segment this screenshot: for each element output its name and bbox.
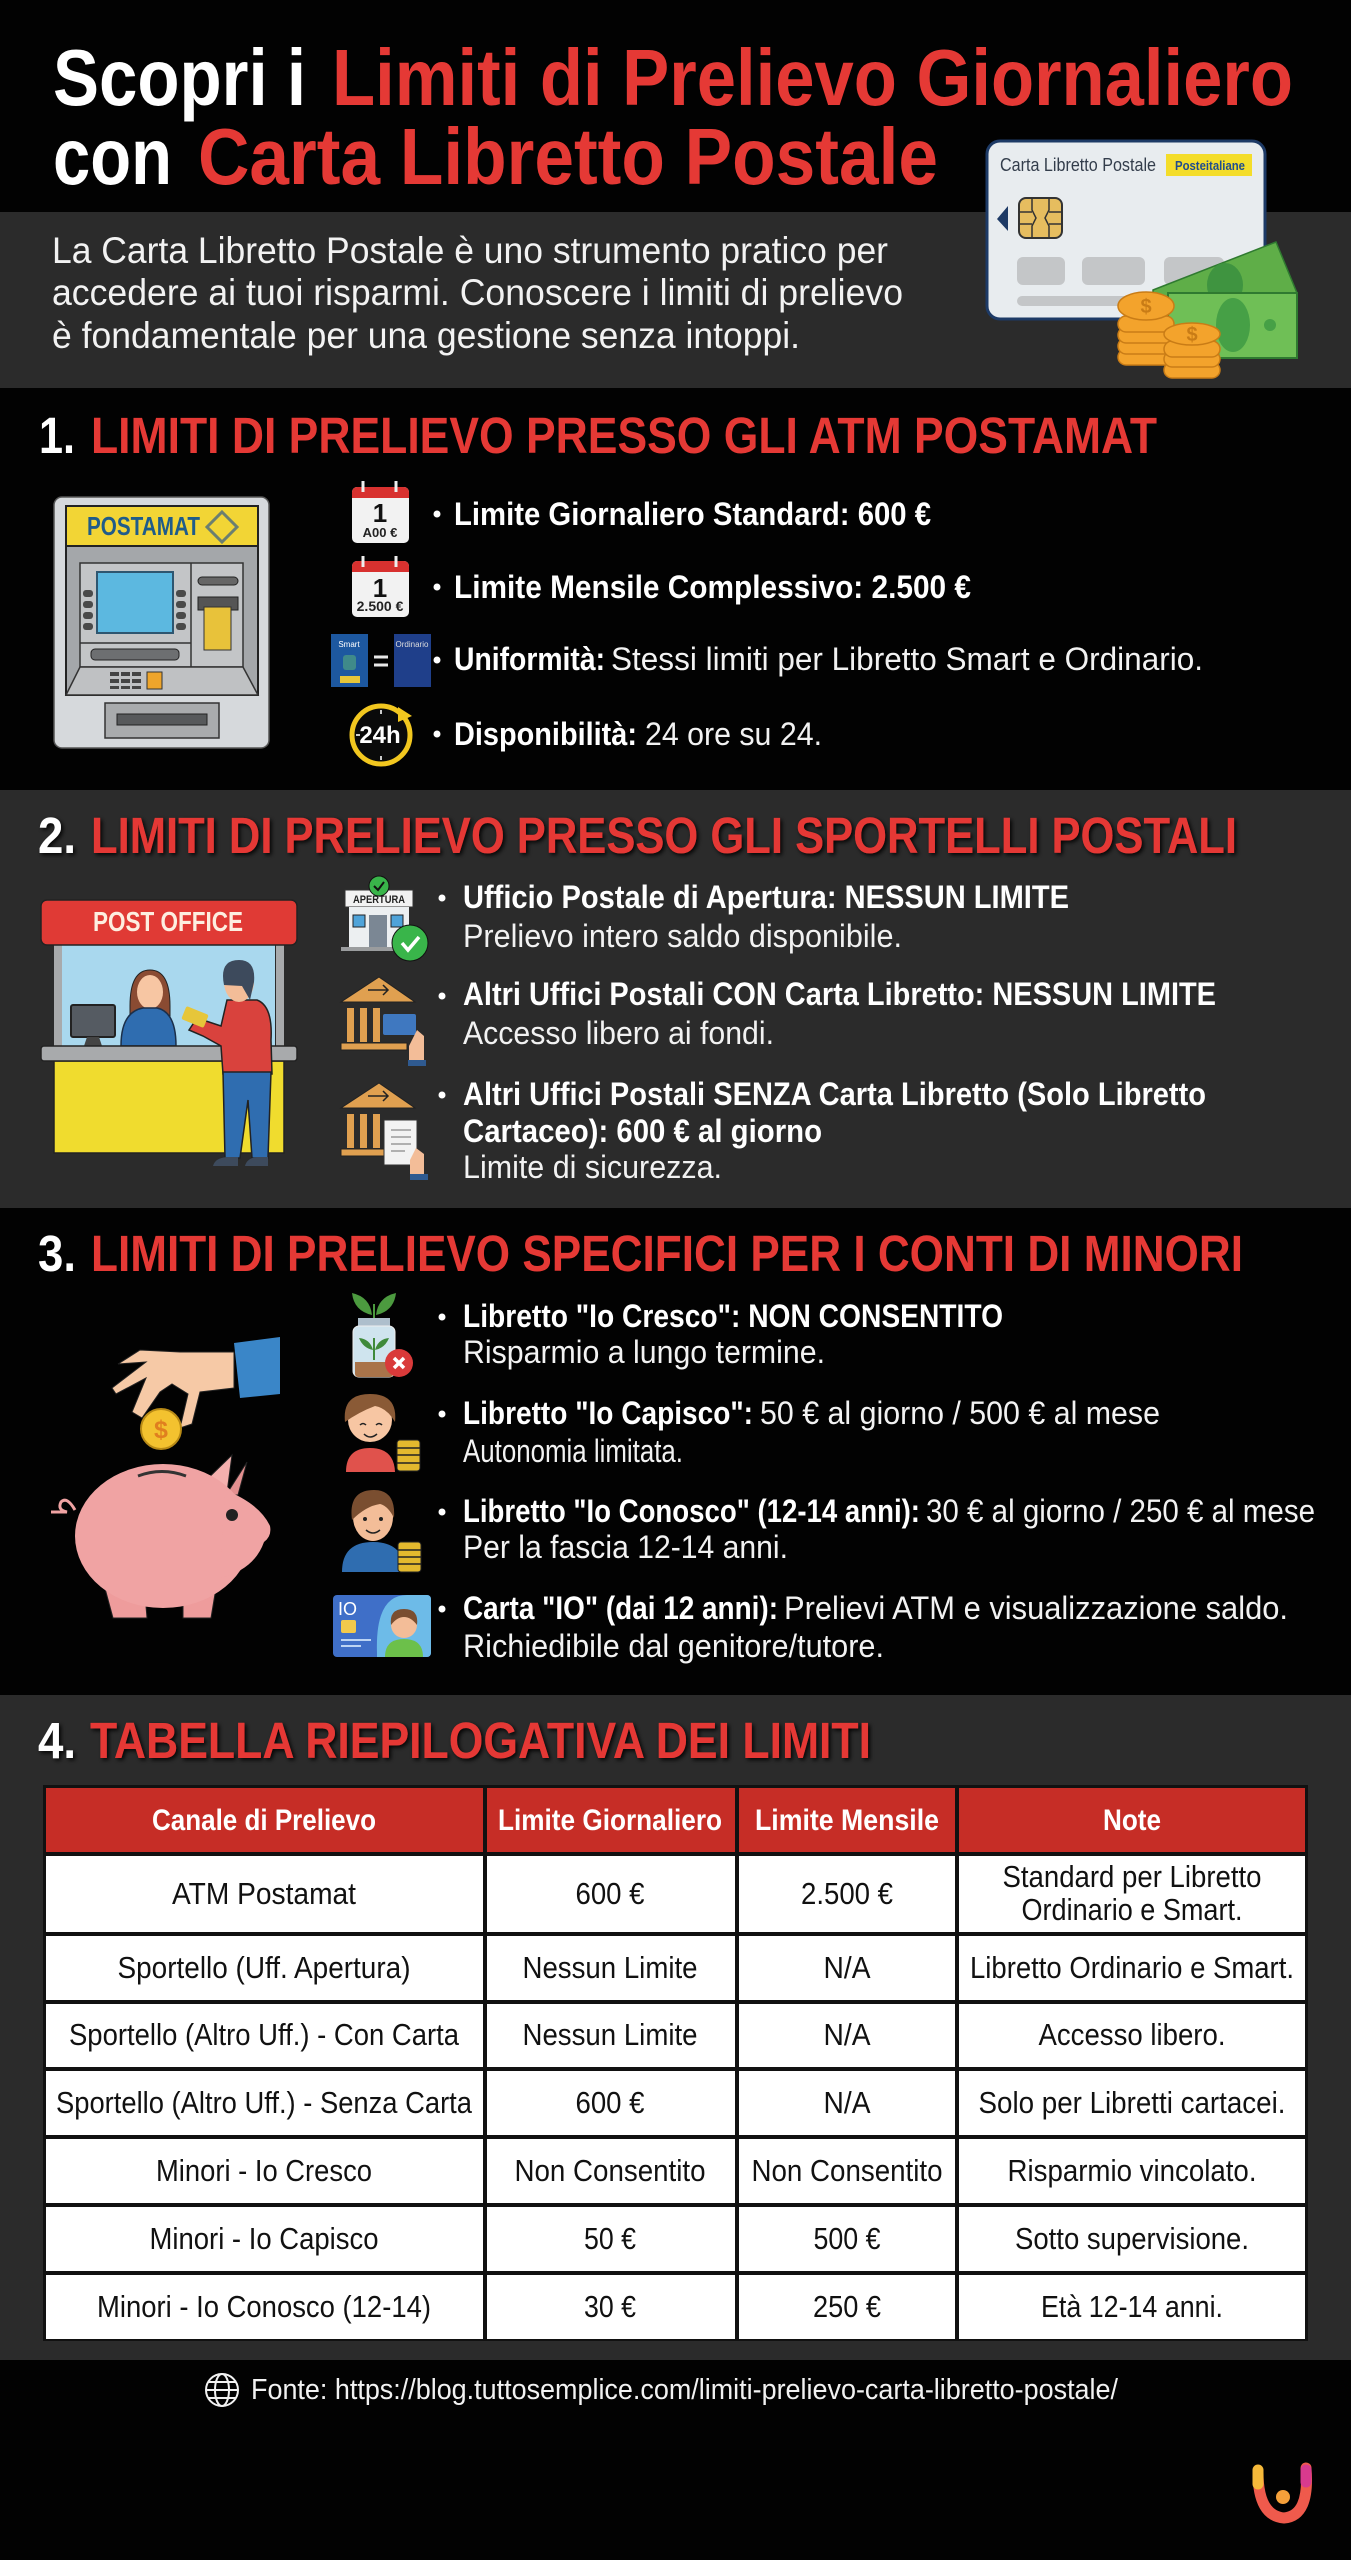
icon: bank with card bbox=[341, 977, 426, 1066]
bullet: Io Conosco bbox=[438, 1493, 1315, 1565]
bullet: Io Capisco: 50 € al giorno / 500 € al mese bbox=[760, 1395, 1160, 1431]
table header row: Canale di Prelievo bbox=[152, 1804, 376, 1837]
bullet: other offices with card: Altri Uffici Postali CON Carta Libretto: NESSUN LIMITE bbox=[463, 976, 1216, 1012]
row: Sportello Altro Uff. Senza Carta: 600 € bbox=[576, 2085, 644, 2120]
icon: postal card with money and coins bbox=[987, 141, 1297, 378]
panel: section 1 ATM bbox=[0, 388, 1351, 790]
bullet: opening office: Ufficio Postale di Apertura: NESSUN LIMITE bbox=[463, 879, 1069, 915]
icon: teen with coins bbox=[342, 1490, 421, 1572]
row: Sportello Altro Uff. Con Carta bbox=[46, 2004, 1305, 2067]
bullet: Io Cresco: Risparmio a lungo termine. bbox=[463, 1334, 825, 1370]
row: Minori Io Cresco: Non Consentito bbox=[752, 2153, 942, 2188]
bullet: monthly limit: Limite Mensile Complessivo: 2.500 € bbox=[454, 569, 971, 605]
bullet: Io Capisco: Libretto "Io Capisco": bbox=[463, 1395, 753, 1431]
bullet: availability: Disponibilità: bbox=[454, 716, 637, 752]
table header row: Note bbox=[1103, 1804, 1161, 1837]
bullet: Carta IO bbox=[438, 1590, 1288, 1664]
icon: child with coins bbox=[345, 1394, 420, 1472]
row: Sportello Altro Uff. Senza Carta: Sportello (Altro Uff.) - Senza Carta bbox=[56, 2085, 473, 2120]
table header row: Limite Mensile bbox=[755, 1804, 939, 1837]
icon: postal card with money and coins: $ bbox=[1140, 296, 1152, 318]
heading 1: 1. bbox=[39, 407, 75, 464]
row: Minori Io Cresco: Minori - Io Cresco bbox=[156, 2153, 372, 2188]
icon: calendar daily: 1 bbox=[373, 498, 387, 528]
row: Minori Io Cresco bbox=[46, 2139, 1305, 2203]
bullet: opening office bbox=[438, 879, 1069, 954]
illustration: piggy bank with hand and coin: $ bbox=[154, 1416, 168, 1444]
bullet: other offices without card: Limite di sicurezza. bbox=[463, 1149, 722, 1185]
row: Minori Io Capisco: 50 € bbox=[584, 2221, 636, 2256]
icon: 24h clock bbox=[352, 706, 412, 764]
bullet: availability: 24 ore su 24. bbox=[645, 716, 822, 752]
panel: section 4 summary table bbox=[0, 1695, 1351, 2360]
bullet: Io Capisco bbox=[438, 1395, 1160, 1469]
footer source: Fonte: https://blog.tuttosemplice.com/limiti-prelievo-carta-libretto-postale/ bbox=[251, 2374, 1119, 2406]
panel: section 2 post office bbox=[0, 790, 1351, 1208]
row: Sportello Uff. Apertura: Sportello (Uff. Apertura) bbox=[118, 1950, 410, 1985]
row: ATM Postamat: Ordinario e Smart. bbox=[1022, 1892, 1242, 1927]
illustration: post office counter bbox=[41, 900, 297, 1166]
row: ATM Postamat: Standard per Libretto bbox=[1002, 1859, 1262, 1894]
icon: 24h clock: 24h bbox=[359, 722, 401, 749]
row: Sportello Uff. Apertura: Nessun Limite bbox=[522, 1950, 698, 1985]
row: Minori Io Capisco: Minori - Io Capisco bbox=[150, 2221, 378, 2256]
bullet: Io Capisco: Autonomia limitata. bbox=[463, 1433, 683, 1469]
heading 4: 4. bbox=[38, 1712, 76, 1769]
bullet: daily limit: Limite Giornaliero Standard: 600 € bbox=[454, 496, 931, 532]
bullet: Io Conosco: Per la fascia 12-14 anni. bbox=[463, 1529, 788, 1565]
illustration: post office counter: POST OFFICE bbox=[93, 906, 243, 937]
icon: postamat ATM: POSTAMAT bbox=[87, 511, 200, 541]
row: Minori Io Conosco bbox=[46, 2275, 1305, 2339]
row: ATM Postamat bbox=[46, 1856, 1305, 1932]
bullet: Io Conosco: Libretto "Io Conosco" (12-14 anni): bbox=[463, 1493, 920, 1529]
bullet: availability bbox=[434, 716, 822, 752]
row: Minori Io Conosco: 30 € bbox=[584, 2289, 636, 2324]
icon: calendar monthly: 2.500 € bbox=[357, 598, 404, 614]
row: Minori Io Conosco: 250 € bbox=[813, 2289, 881, 2324]
bullet: Io Conosco: 30 € al giorno / 250 € al mese bbox=[926, 1493, 1315, 1529]
icon: bank with paper booklet bbox=[341, 1083, 428, 1180]
heading 3: 3. bbox=[38, 1225, 76, 1282]
icon: booklets equal bbox=[331, 634, 431, 687]
bullet: Carta IO: Prelievi ATM e visualizzazione saldo. bbox=[784, 1590, 1288, 1626]
row: Sportello Uff. Apertura: N/A bbox=[824, 1950, 871, 1985]
title bbox=[53, 33, 1293, 201]
bullet: uniformity: Uniformità: bbox=[454, 641, 605, 677]
row: Minori Io Cresco: Non Consentito bbox=[514, 2153, 706, 2188]
intro text: accedere ai tuoi risparmi. Conoscere i limiti di prelievo bbox=[52, 272, 903, 313]
icon: IO card bbox=[333, 1595, 431, 1657]
row: Minori Io Capisco bbox=[46, 2207, 1305, 2271]
bullet: other offices without card: Cartaceo): 600 € al giorno bbox=[463, 1113, 822, 1149]
row: Sportello Uff. Apertura: Libretto Ordinario e Smart. bbox=[970, 1950, 1294, 1985]
icon: postal card with money and coins: Carta Libretto Postale bbox=[1000, 155, 1156, 175]
bullet: Carta IO: Richiedibile dal genitore/tutore. bbox=[463, 1628, 884, 1664]
heading 2: 2. bbox=[38, 807, 76, 864]
title: con bbox=[53, 112, 172, 201]
row: Sportello Altro Uff. Con Carta: Nessun Limite bbox=[522, 2017, 698, 2052]
row: Sportello Altro Uff. Senza Carta bbox=[46, 2071, 1305, 2135]
title: Carta Libretto Postale bbox=[198, 112, 938, 201]
icon: booklets equal: Smart bbox=[338, 640, 360, 649]
heading 1: LIMITI DI PRELIEVO PRESSO GLI ATM POSTAMAT bbox=[91, 407, 1157, 464]
icon: globe bbox=[206, 2374, 238, 2406]
row: Sportello Altro Uff. Con Carta: N/A bbox=[824, 2017, 871, 2052]
table header row bbox=[46, 1788, 1305, 1852]
icon: postamat ATM bbox=[54, 497, 269, 748]
intro text bbox=[52, 230, 903, 356]
icon: postal card with money and coins: $ bbox=[1186, 324, 1198, 346]
title: Scopri i bbox=[53, 33, 306, 122]
bullet: other offices with card: Accesso libero ai fondi. bbox=[463, 1015, 774, 1051]
icon: postal card with money and coins: Posteitaliane bbox=[1175, 158, 1245, 173]
icon: jar with plant bbox=[352, 1293, 413, 1377]
row: Sportello Altro Uff. Senza Carta: N/A bbox=[824, 2085, 871, 2120]
icon: opening office: APERTURA bbox=[353, 894, 405, 906]
icon: calendar daily: A00 € bbox=[363, 525, 397, 540]
panel: header bbox=[0, 0, 1351, 388]
bullet: other offices with card bbox=[438, 976, 1216, 1051]
icon: calendar daily bbox=[352, 481, 409, 543]
table of limits bbox=[43, 1785, 1308, 2341]
row: Minori Io Conosco: Minori - Io Conosco (12-14) bbox=[97, 2289, 431, 2324]
row: Minori Io Capisco: Sotto supervisione. bbox=[1015, 2221, 1249, 2256]
row: Minori Io Capisco: 500 € bbox=[814, 2221, 880, 2256]
row: Sportello Altro Uff. Senza Carta: Solo per Libretti cartacei. bbox=[978, 2085, 1286, 2120]
bullet: other offices without card: Altri Uffici Postali SENZA Carta Libretto (Solo Libretto bbox=[463, 1076, 1206, 1112]
table header row: Limite Giornaliero bbox=[498, 1804, 722, 1837]
bullet: opening office: Prelievo intero saldo disponibile. bbox=[463, 918, 902, 954]
heading 4: TABELLA RIEPILOGATIVA DEI LIMITI bbox=[90, 1712, 871, 1769]
illustration: piggy bank with hand and coin bbox=[51, 1337, 280, 1618]
bullet: Carta IO: Carta "IO" (dai 12 anni): bbox=[463, 1590, 778, 1626]
bullet: Io Cresco bbox=[438, 1298, 1003, 1370]
bullet: Io Cresco: Libretto "Io Cresco": NON CONSENTITO bbox=[463, 1298, 1003, 1334]
intro text: è fondamentale per una gestione senza intoppi. bbox=[52, 315, 800, 356]
icon: booklets equal: Ordinario bbox=[396, 640, 429, 649]
icon: calendar monthly bbox=[352, 556, 409, 617]
row: Minori Io Conosco: Età 12-14 anni. bbox=[1041, 2289, 1223, 2324]
icon: opening office bbox=[341, 876, 428, 961]
row: Minori Io Cresco: Risparmio vincolato. bbox=[1008, 2153, 1256, 2188]
intro text: La Carta Libretto Postale è uno strumento pratico per bbox=[52, 230, 888, 271]
panel: section 3 minors bbox=[0, 1208, 1351, 1695]
bullet: other offices without card bbox=[438, 1076, 1206, 1185]
icon: IO card: IO bbox=[338, 1599, 357, 1619]
logo bbox=[1258, 2468, 1307, 2518]
row: ATM Postamat: ATM Postamat bbox=[172, 1876, 356, 1911]
row: Sportello Uff. Apertura bbox=[46, 1936, 1305, 2000]
row: Sportello Altro Uff. Con Carta: Sportello (Altro Uff.) - Con Carta bbox=[69, 2017, 460, 2052]
row: ATM Postamat: 2.500 € bbox=[801, 1876, 893, 1911]
bullet: uniformity: Stessi limiti per Libretto Smart e Ordinario. bbox=[611, 641, 1203, 677]
row: ATM Postamat: 600 € bbox=[576, 1876, 644, 1911]
icon: calendar monthly: 1 bbox=[373, 573, 387, 603]
row: Sportello Altro Uff. Con Carta: Accesso libero. bbox=[1038, 2017, 1226, 2052]
